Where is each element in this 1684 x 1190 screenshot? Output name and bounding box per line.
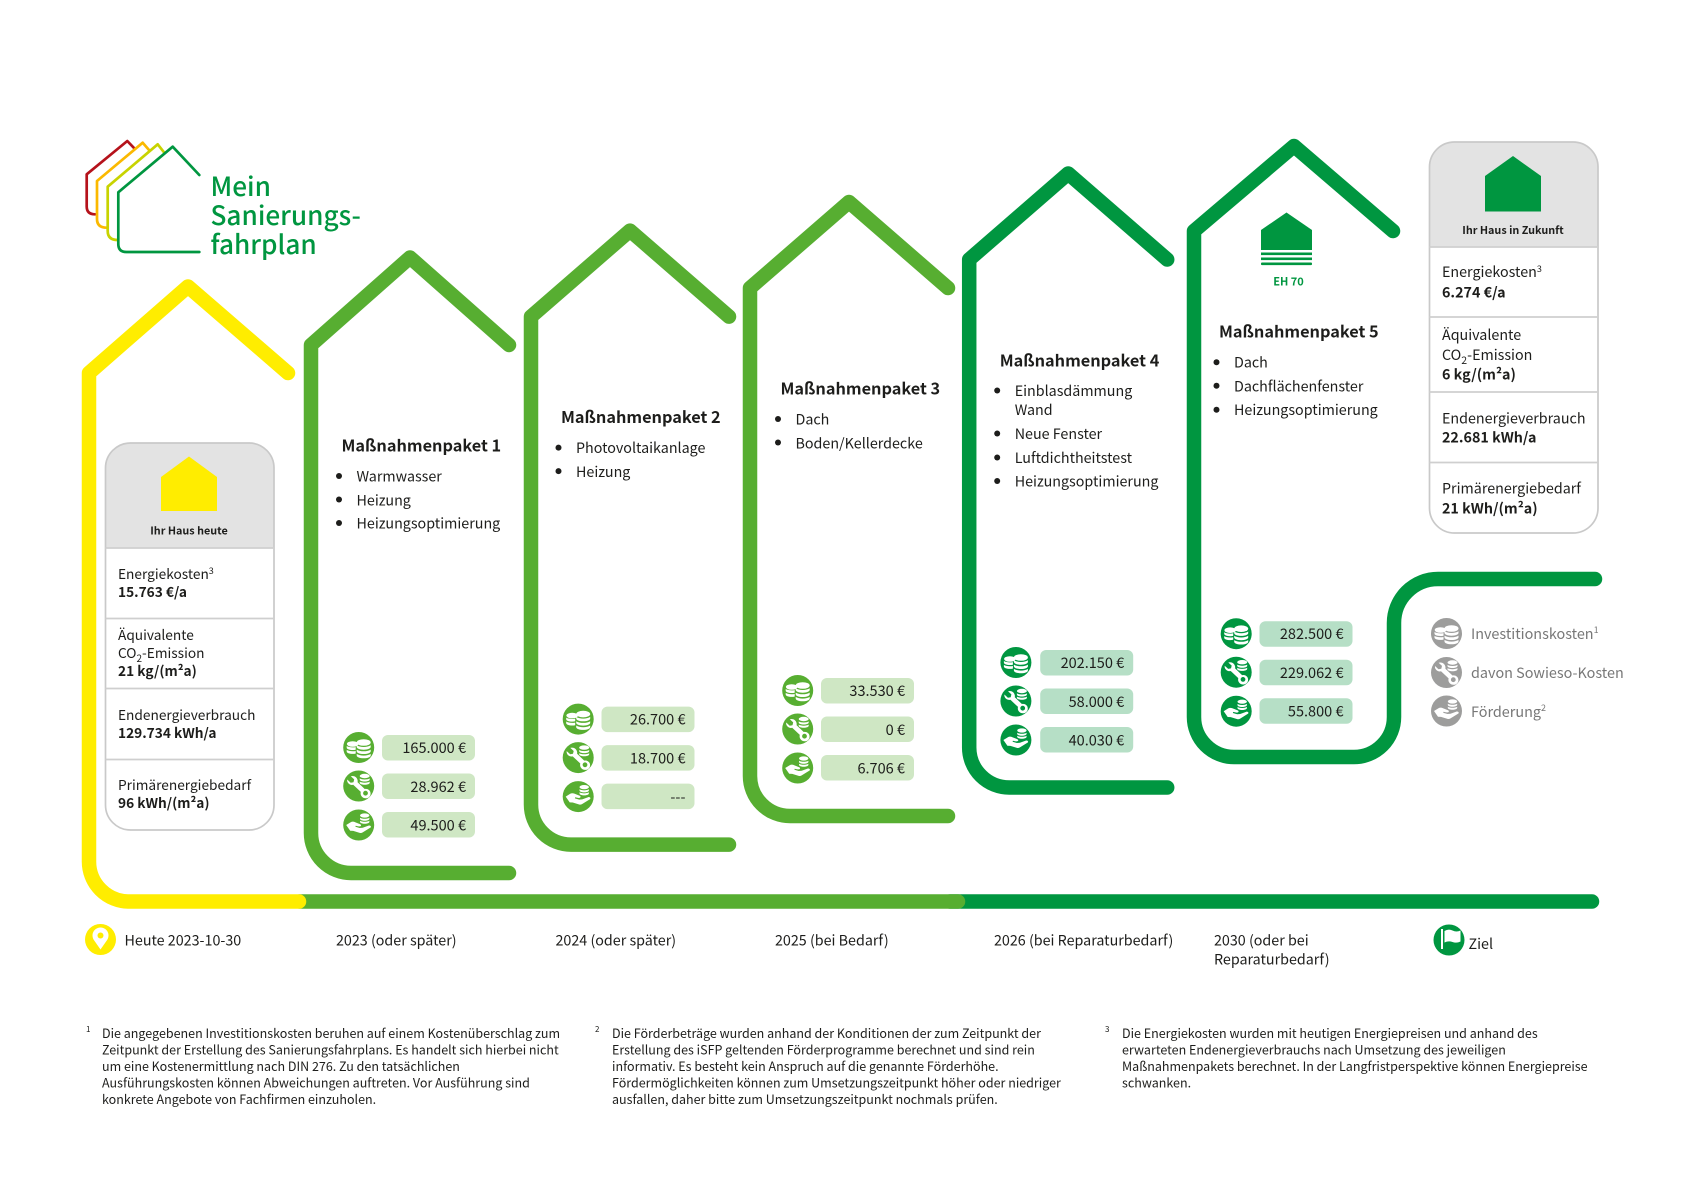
logo title: Mein	[210, 166, 271, 204]
footnote 3: Maßnahmenpakets berechnet. In der Langfristperspektive können Energiepreise	[1122, 1056, 1588, 1075]
footnote 1: Zeitpunkt der Erstellung des Sanierungsfahrplans. Es handelt sich hierbei nicht	[102, 1040, 559, 1058]
footnote 1: 1	[86, 1024, 90, 1035]
costs: 165.000 €	[402, 737, 466, 758]
label: EH 70: EH 70	[1273, 274, 1304, 290]
metric: Energiekosten: Energiekosten	[1442, 261, 1537, 282]
metric: CO2: 2	[136, 650, 142, 665]
list	[556, 437, 706, 482]
metric: Endenergieverbrauch: 22.681 kWh/a	[1442, 426, 1536, 448]
footnote 2: ausfallen, daher bitte zum Umsetzungszeitpunkt nochmals prüfen.	[612, 1089, 998, 1108]
costs: 26.700 €	[630, 709, 686, 730]
metric: Endenergieverbrauch: Endenergieverbrauch	[1442, 408, 1586, 428]
timeline labels: 2030 (oder bei	[1214, 930, 1309, 950]
legend: 2	[1541, 701, 1546, 714]
footnote 2: informativ. Es besteht kein Anspruch auf die genannte Förderhöhe.	[612, 1056, 999, 1075]
metric: CO2: Äquivalente	[118, 624, 194, 644]
list: Heizungsoptimierung	[1015, 470, 1158, 492]
list: Neue Fenster	[1015, 423, 1103, 444]
costs: 229.062 €	[1280, 662, 1344, 683]
metric: CO2: 2	[1461, 353, 1467, 368]
timeline line: mid green	[300, 894, 958, 909]
list	[336, 466, 500, 534]
list: Dach	[796, 408, 829, 430]
costs	[563, 704, 694, 812]
costs	[782, 675, 914, 784]
list: Heizungsoptimierung	[356, 512, 500, 534]
legend: davon Sowieso-Kosten	[1471, 662, 1624, 683]
footnote 2: Erstellung des iSFP geltenden Förderprogramme berechnet und sind rein	[612, 1040, 1035, 1058]
legend: Förderung	[1471, 701, 1541, 722]
metric: Energiekosten: 6.274 €/a	[1442, 282, 1506, 302]
heading: Maßnahmenpaket 5	[1219, 319, 1379, 343]
icon: goal flag	[1434, 924, 1464, 956]
footnote 1: Die angegebenen Investitionskosten beruhen auf einem Kostenüberschlag zum	[102, 1023, 560, 1042]
heading: Maßnahmenpaket 1	[342, 432, 501, 456]
costs: 282.500 €	[1280, 623, 1344, 644]
metric: Endenergieverbrauch: 129.734 kWh/a	[118, 722, 217, 742]
heading: Ihr Haus in Zukunft: Ihr Haus in Zukunft	[1462, 222, 1564, 238]
footnote 3: 3	[1105, 1024, 1109, 1035]
list: Dach	[1234, 352, 1268, 373]
list: Heizungsoptimierung	[1234, 399, 1378, 420]
metric: CO2: -Emission	[142, 642, 204, 662]
footnote 1	[86, 1023, 560, 1108]
list: Einblasdämmung	[1015, 380, 1132, 401]
timeline labels: Reparaturbedarf)	[1214, 948, 1330, 970]
footnote 3	[1105, 1023, 1588, 1092]
metric: Primaerenergiebedarf: Primärenergiebedarf	[118, 774, 252, 794]
metric: CO2: -Emission	[1467, 344, 1532, 365]
costs: 40.030 €	[1069, 730, 1124, 750]
timeline labels: 2025 (bei Bedarf)	[775, 930, 889, 950]
panel: Massnahmenpaket 5	[1194, 146, 1595, 757]
costs: ---	[670, 786, 686, 807]
metric: CO2: 21 kg/(m²a)	[118, 660, 197, 680]
list: Dachflächenfenster	[1234, 376, 1364, 397]
timeline labels	[85, 924, 1493, 970]
heading: Maßnahmenpaket 3	[780, 376, 940, 400]
metric: Energiekosten: 15.763 €/a	[118, 581, 187, 601]
list: Heizung	[576, 461, 630, 482]
panel: Massnahmenpaket 4	[969, 174, 1167, 788]
panel: Ihr Haus heute	[106, 443, 274, 830]
list: Warmwasser	[356, 466, 442, 486]
heading: Maßnahmenpaket 4	[1000, 348, 1160, 372]
list: Photovoltaikanlage	[576, 437, 706, 458]
logo icon: coloured houses	[87, 141, 199, 252]
logo title: Sanierungs-	[210, 195, 361, 233]
costs: 33.530 €	[849, 680, 905, 701]
timeline labels: 2026 (bei Reparaturbedarf)	[994, 930, 1173, 950]
list	[994, 380, 1158, 492]
heading: Ihr Haus heute: Ihr Haus heute	[150, 522, 228, 538]
metric: Primaerenergiebedarf: Primärenergiebedarf	[1442, 478, 1582, 498]
metric: CO2: CO	[118, 642, 136, 662]
metric: Endenergieverbrauch: Endenergieverbrauch	[118, 704, 255, 724]
panel: Massnahmenpaket 2	[531, 231, 729, 845]
footnote 3: Die Energiekosten wurden mit heutigen Energiepreisen und anhand des	[1122, 1023, 1538, 1042]
footnote 3: erwarteten Endenergieverbrauchs nach Umsetzung des jeweiligen	[1122, 1040, 1506, 1058]
costs: 0 €	[886, 719, 905, 740]
metric: Energiekosten: Energiekosten	[118, 563, 209, 583]
costs: 28.962 €	[410, 776, 466, 797]
timeline labels: 2024 (oder später)	[556, 930, 676, 950]
icon: green house	[1485, 156, 1541, 212]
list: Heizung	[356, 490, 411, 510]
legend: 1	[1594, 623, 1599, 636]
metric: Energiekosten: 3	[1537, 262, 1542, 275]
logo title: fahrplan	[210, 224, 317, 262]
footnote 2	[595, 1023, 1061, 1108]
timeline line: dark green	[950, 894, 1592, 909]
costs: 18.700 €	[630, 748, 686, 769]
footnote 2: 2	[595, 1024, 600, 1035]
metric: Primaerenergiebedarf: 21 kWh/(m²a)	[1442, 498, 1538, 518]
metric: CO2: CO	[1442, 344, 1461, 365]
icon: EH 70 house	[1261, 212, 1312, 265]
metric: CO2: 6 kg/(m²a)	[1442, 364, 1516, 384]
panel: Ihr Haus in Zukunft	[1430, 142, 1598, 533]
costs: 58.000 €	[1069, 691, 1124, 712]
costs: 55.800 €	[1288, 701, 1344, 722]
footnote 3: schwanken.	[1122, 1072, 1191, 1092]
legend	[1431, 618, 1624, 726]
list	[775, 408, 923, 454]
icon: yellow house	[161, 456, 217, 511]
costs	[1000, 647, 1133, 756]
list: Wand	[1015, 399, 1053, 420]
heading: Maßnahmenpaket 2	[561, 404, 721, 428]
logo: Mein Sanierungsfahrplan	[87, 141, 361, 262]
icon: location pin	[85, 924, 116, 955]
metric: Primaerenergiebedarf: 96 kWh/(m²a)	[118, 792, 210, 812]
legend: Investitionskosten	[1471, 623, 1594, 644]
panel: Massnahmenpaket 1	[311, 258, 509, 873]
costs: 202.150 €	[1061, 652, 1124, 673]
metric: CO2: Äquivalente	[1442, 324, 1521, 345]
costs	[343, 732, 475, 840]
timeline labels: Ziel	[1468, 933, 1493, 954]
list	[1214, 352, 1378, 420]
footnote 2: Fördermöglichkeiten können zum Umsetzungszeitpunkt höher oder niedriger	[612, 1072, 1061, 1092]
costs: 49.500 €	[410, 814, 466, 836]
house outline: today	[89, 286, 299, 902]
footnote 1: konkrete Angebote von Fachfirmen einzuholen.	[102, 1089, 376, 1108]
footnote 1: Ausführungskosten können Abweichungen auftreten. Vor Ausführung sind	[102, 1072, 530, 1092]
costs	[1221, 618, 1352, 727]
metric: Energiekosten: 3	[209, 564, 214, 577]
list: Boden/Kellerdecke	[796, 432, 923, 454]
list: Luftdichtheitstest	[1015, 447, 1133, 468]
timeline labels: Heute 2023-10-30	[124, 930, 241, 950]
timeline labels: 2023 (oder später)	[336, 930, 457, 950]
costs: 6.706 €	[857, 758, 905, 778]
footnote 1: um eine Kostenermittlung nach DIN 276. Zu den tatsächlichen	[102, 1056, 460, 1075]
footnote 2: Die Förderbeträge wurden anhand der Konditionen der zum Zeitpunkt der	[612, 1023, 1041, 1042]
panel: Massnahmenpaket 3	[750, 202, 948, 816]
